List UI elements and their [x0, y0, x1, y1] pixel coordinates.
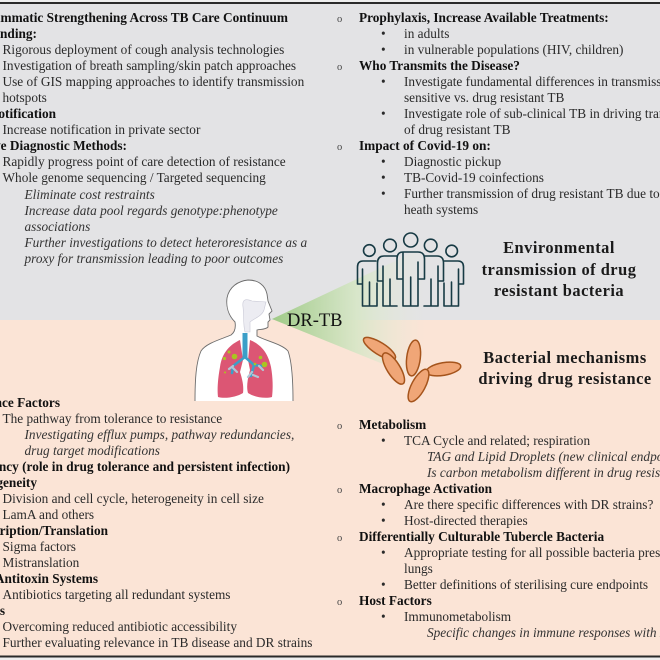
- icon: group of people: [358, 233, 464, 306]
- panel: bacterial mechanisms background: [0, 320, 660, 656]
- icon: bacteria: [361, 334, 462, 405]
- heading: environmental transmission: resistant bacteria: [494, 281, 624, 300]
- text block: prophylaxis, transmission and Covid-19: Who Transmits the Disease?: [359, 58, 520, 73]
- text block: metabolism and host factors: o: [337, 421, 342, 432]
- text block: prophylaxis, transmission and Covid-19: •: [381, 186, 386, 201]
- text block: resistance factors and persistence: drug target modifications: [24, 443, 160, 458]
- bronchi: [232, 357, 262, 376]
- body outline: [195, 280, 293, 401]
- text block: prophylaxis, transmission and Covid-19: [337, 10, 660, 217]
- text block: metabolism and host factors: Immunometabolism: [404, 609, 512, 624]
- text block: programmatic strengthening: hotspots: [2, 90, 47, 105]
- text block: metabolism and host factors: Are there specific differences with DR strains?: [404, 497, 653, 512]
- text block: prophylaxis, transmission and Covid-19: TB-Covid-19 coinfections: [404, 170, 544, 185]
- text block: programmatic strengthening: [0, 10, 307, 266]
- top border: [0, 2, 660, 4]
- text block: resistance factors and persistence: Antibiotics targeting all redundant systems: [2, 587, 230, 602]
- right lung: [247, 340, 273, 398]
- text block: resistance factors and persistence: Further evaluating relevance in TB disease and DR strains: [2, 635, 312, 650]
- text block: programmatic strengthening: Whole genome sequencing / Targeted sequencing: [2, 170, 266, 185]
- text block: metabolism and host factors: Host Factors: [359, 593, 432, 608]
- panel: environmental transmission background: [0, 3, 660, 320]
- heading: environmental transmission: [482, 238, 637, 300]
- bottom border: [0, 656, 660, 658]
- label: DR-TB: DR-TB: [287, 311, 342, 331]
- text block: metabolism and host factors: •: [381, 513, 386, 528]
- heading: environmental transmission: Environmental: [503, 238, 615, 257]
- text block: resistance factors and persistence: Overcoming reduced antibiotic accessibility: [2, 619, 237, 634]
- text block: programmatic strengthening: proxy for transmission leading to poor outcomes: [24, 251, 283, 266]
- text block: metabolism and host factors: lungs: [404, 561, 433, 576]
- text block: programmatic strengthening: Use of GIS mapping approaches to identify transmission: [2, 74, 305, 89]
- text block: metabolism and host factors: •: [381, 577, 386, 592]
- text block: resistance factors and persistence: LamA and others: [2, 507, 94, 522]
- text block: metabolism and host factors: •: [381, 545, 386, 560]
- text block: prophylaxis, transmission and Covid-19: in adults: [404, 26, 449, 41]
- text block: metabolism and host factors: •: [381, 609, 386, 624]
- text block: metabolism and host factors: Macrophage Activation: [359, 481, 493, 496]
- text block: prophylaxis, transmission and Covid-19: o: [337, 14, 342, 25]
- text block: prophylaxis, transmission and Covid-19: •: [381, 74, 386, 89]
- text block: metabolism and host factors: •: [381, 497, 386, 512]
- text block: prophylaxis, transmission and Covid-19: •: [381, 106, 386, 121]
- text block: metabolism and host factors: Differentially Culturable Tubercle Bacteria: [359, 529, 604, 544]
- text block: prophylaxis, transmission and Covid-19: o: [337, 62, 342, 73]
- text block: metabolism and host factors: •: [381, 433, 386, 448]
- text block: metabolism and host factors: Host-directed therapies: [404, 513, 528, 528]
- text block: prophylaxis, transmission and Covid-19: •: [381, 26, 386, 41]
- heading: bacterial mechanisms: driving drug resistance: [478, 369, 652, 388]
- text block: resistance factors and persistence: Sigma factors: [2, 539, 76, 554]
- text block: prophylaxis, transmission and Covid-19: heath systems: [404, 202, 478, 217]
- text block: metabolism and host factors: [337, 417, 660, 640]
- text block: metabolism and host factors: o: [337, 597, 342, 608]
- text block: resistance factors and persistence: [0, 395, 312, 650]
- text block: programmatic strengthening: Rapidly progress point of care detection of resistance: [2, 154, 286, 169]
- alveoli clusters: [229, 366, 263, 377]
- infection spots: [223, 350, 267, 374]
- text block: programmatic strengthening: Investigation of breath sampling/skin patch approaches: [2, 58, 296, 73]
- text block: prophylaxis, transmission and Covid-19: •: [381, 42, 386, 57]
- text block: prophylaxis, transmission and Covid-19: sensitive vs. drug resistant TB: [404, 90, 565, 105]
- text block: metabolism and host factors: o: [337, 533, 342, 544]
- text block: metabolism and host factors: TCA Cycle and related; respiration: [404, 433, 590, 448]
- text block: programmatic strengthening: Eliminate cost restraints: [24, 187, 155, 202]
- left lung: [218, 340, 243, 398]
- text block: prophylaxis, transmission and Covid-19: of drug resistant TB: [404, 122, 511, 137]
- green beam from patient: [272, 247, 425, 381]
- text block: prophylaxis, transmission and Covid-19: Impact of Covid-19 on:: [359, 138, 491, 153]
- heading: bacterial mechanisms: [478, 348, 652, 388]
- text block: resistance factors and persistence: Mistranslation: [2, 555, 80, 570]
- text block: prophylaxis, transmission and Covid-19: •: [381, 170, 386, 185]
- text block: prophylaxis, transmission and Covid-19: in vulnerable populations (HIV, children): [404, 42, 623, 57]
- text block: prophylaxis, transmission and Covid-19: o: [337, 142, 342, 153]
- text block: resistance factors and persistence: The pathway from tolerance to resistance: [2, 411, 222, 426]
- heading: environmental transmission: transmission of drug: [482, 260, 637, 279]
- icon: human torso with infected lungs: [195, 280, 293, 401]
- text block: prophylaxis, transmission and Covid-19: Prophylaxis, Increase Available Treatments:: [359, 10, 609, 25]
- text block: resistance factors and persistence: Division and cell cycle, heterogeneity in cell size: [2, 491, 264, 506]
- text block: prophylaxis, transmission and Covid-19: Diagnostic pickup: [404, 154, 501, 169]
- text block: programmatic strengthening: Further investigations to detect heteroresistance as a: [24, 235, 307, 250]
- text block: metabolism and host factors: o: [337, 485, 342, 496]
- text block: programmatic strengthening: associations: [24, 219, 90, 234]
- text block: resistance factors and persistence: Investigating efflux pumps, pathway redundancies,: [24, 427, 294, 442]
- trachea: [242, 333, 248, 358]
- text block: prophylaxis, transmission and Covid-19: •: [381, 154, 386, 169]
- text block: metabolism and host factors: Metabolism: [359, 417, 426, 432]
- heading: bacterial mechanisms: Bacterial mechanisms: [483, 348, 647, 367]
- text block: programmatic strengthening: Rigorous deployment of cough analysis technologies: [2, 42, 284, 57]
- airway: [243, 300, 266, 332]
- text block: programmatic strengthening: Increase data pool regards genotype:phenotype: [24, 203, 278, 218]
- text block: programmatic strengthening: Increase notification in private sector: [2, 122, 201, 137]
- text block: metabolism and host factors: Better definitions of sterilising cure endpoints: [404, 577, 648, 592]
